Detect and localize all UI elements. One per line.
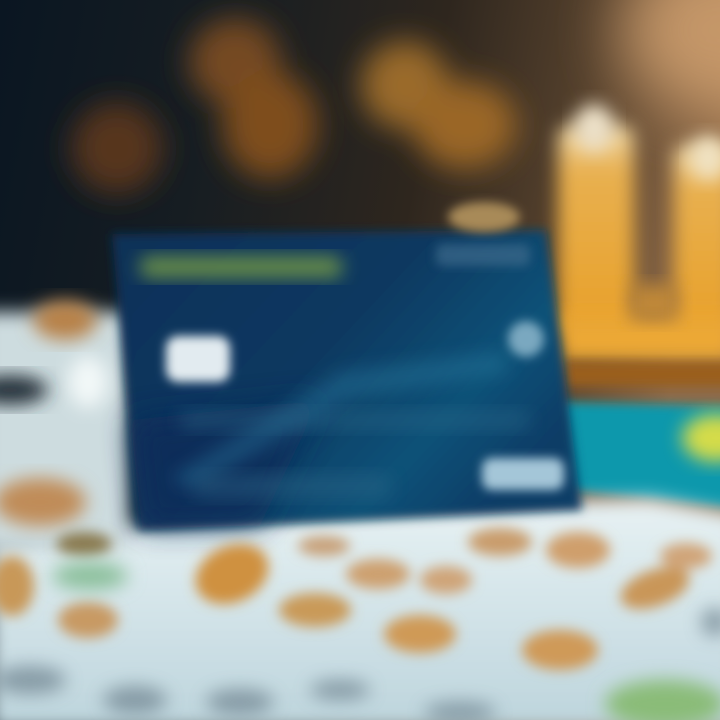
- card icon: right contactless mark: [508, 321, 544, 357]
- figure: [103, 686, 167, 714]
- bar: right golden column: [674, 145, 720, 335]
- bar chart: golden blurred bars: [558, 104, 720, 386]
- coins: scattered on the table: [0, 528, 712, 670]
- icon: yellow-green spot: [682, 414, 720, 462]
- bar base: brown shadow: [565, 362, 720, 386]
- coin: [420, 566, 472, 594]
- coin: [56, 532, 112, 556]
- coin: [346, 559, 410, 589]
- card logo: bottom right: [482, 458, 564, 490]
- card text: name row: [195, 474, 390, 498]
- coin: [186, 533, 278, 615]
- figure: [310, 680, 370, 700]
- card text: top right label: [436, 244, 530, 266]
- bar: left golden column: [558, 125, 634, 335]
- panel: left paper stack: [0, 300, 130, 552]
- glow: top right warm light: [620, 0, 720, 115]
- coin: top right blurred coin: [361, 41, 517, 169]
- dark slot: [0, 375, 48, 405]
- figure: [0, 666, 66, 694]
- coin: [522, 630, 598, 670]
- panel: table with paper: [0, 498, 720, 720]
- card bottom-left dark tone: [130, 400, 320, 528]
- coin: peeking above card: [448, 202, 520, 232]
- accent: left green: [52, 562, 128, 590]
- card chip: [166, 336, 230, 382]
- coin: [0, 556, 34, 616]
- figure: [701, 608, 720, 636]
- accent: bottom right green: [605, 680, 720, 720]
- card body: [112, 230, 582, 530]
- coin: [468, 528, 532, 556]
- table rows: dark blurred figures: [0, 608, 720, 720]
- bar highlight: right tip: [690, 136, 720, 180]
- coin: [58, 602, 118, 638]
- bar base: golden shelf: [560, 315, 720, 361]
- paper highlight: [68, 356, 108, 408]
- bar base: stem between columns: [630, 285, 678, 321]
- bar highlight: left tip: [574, 104, 614, 152]
- coin: [546, 532, 610, 568]
- panel: teal book: [560, 402, 720, 510]
- coin: on paper top: [33, 300, 97, 340]
- card light streak: [170, 352, 510, 490]
- card text: number row: [180, 410, 530, 430]
- figure: [424, 702, 496, 720]
- coin: on paper bottom: [0, 478, 86, 526]
- credit card: [112, 230, 582, 530]
- coin: [384, 615, 456, 653]
- card text: yellow heading: [140, 256, 342, 278]
- coin: [615, 559, 695, 617]
- coin: [298, 536, 350, 556]
- coin: far left blurred coin: [71, 102, 163, 194]
- coin: top centre blurred coin: [189, 18, 318, 179]
- coin: [660, 543, 712, 569]
- green accents on paper: [52, 562, 720, 720]
- coin: [279, 593, 351, 627]
- figure: [206, 689, 274, 715]
